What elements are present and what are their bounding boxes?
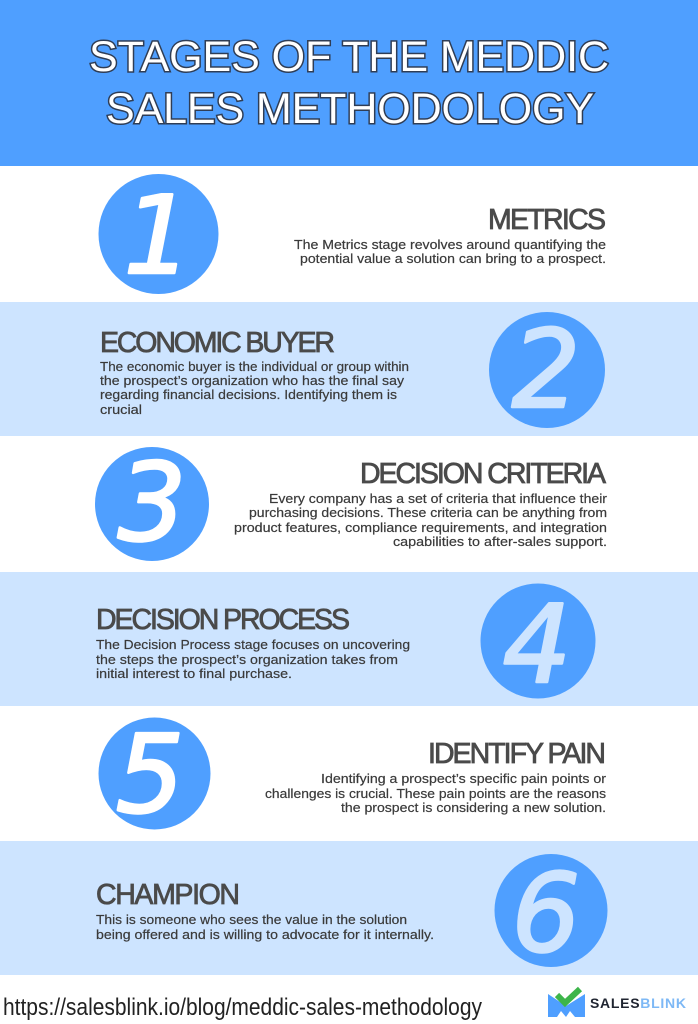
panel: 2 economic buyer: 2 xyxy=(512,308,580,433)
logo: salesblink: SALESBLINK xyxy=(590,995,686,1011)
panel: 1 metrics: 1 xyxy=(124,174,192,299)
panel: 6 champion: being offered and is willing to advocate for it internally. xyxy=(96,927,434,942)
panel: 6 champion: 6 xyxy=(512,852,580,977)
panel: 1 metrics: potential value a solution can bring to a prospect. xyxy=(300,251,606,266)
panel: 2 economic buyer: regarding financial decisions. Identifying them is xyxy=(100,387,398,402)
panel: 5 identify pain: IDENTIFY PAIN xyxy=(428,738,606,770)
logo: salesblink xyxy=(548,989,686,1017)
panel: 5 identify pain: the prospect is considering a new solution. xyxy=(341,800,606,815)
panel: 3 decision criteria: DECISION CRITERIA xyxy=(360,458,606,490)
panel: 2 economic buyer: crucial xyxy=(100,402,142,417)
panel: 2 economic buyer: The economic buyer is the individual or group within xyxy=(100,359,409,374)
panel: 3 decision criteria: capabilities to after-sales support. xyxy=(393,534,607,549)
panel: 5 identify pain: 5 xyxy=(116,713,184,838)
panel: 3 decision criteria xyxy=(0,436,698,572)
panel: 5 identify pain: Identifying a prospect’s specific pain points or xyxy=(321,771,607,786)
panel: 4 decision process: The Decision Process stage focuses on uncovering xyxy=(96,637,410,652)
panel: 5 identify pain xyxy=(0,706,698,841)
header band with title: SALES METHODOLOGY xyxy=(106,85,594,133)
header band with title: STAGES OF THE MEDDIC xyxy=(89,33,609,81)
panel: 3 decision criteria: Every company has a set of criteria that influence their xyxy=(269,491,608,506)
panel: 2 economic buyer: ECONOMIC BUYER xyxy=(100,327,335,359)
panel: 4 decision process: 4 xyxy=(503,583,571,708)
header band with title xyxy=(0,0,698,166)
panel: 6 champion: CHAMPION xyxy=(96,879,240,911)
source url: https://salesblink.io/blog/meddic-sales-methodology xyxy=(3,994,482,1021)
panel: 2 economic buyer: the prospect’s organization who has the final say xyxy=(100,373,405,388)
panel: 3 decision criteria: purchasing decisions. These criteria can be anything from xyxy=(249,505,607,520)
panel: 3 decision criteria: product features, compliance requirements, and integration xyxy=(234,520,607,535)
panel: 3 decision criteria: 3 xyxy=(118,441,186,566)
panel: 6 champion xyxy=(0,841,698,977)
panel: 4 decision process: initial interest to final purchase. xyxy=(96,666,292,681)
panel: 6 champion: This is someone who sees the value in the solution xyxy=(96,912,407,927)
panel: 4 decision process: the steps the prospect’s organization takes from xyxy=(96,652,398,667)
panel: 1 metrics xyxy=(0,166,698,302)
panel: 5 identify pain: challenges is crucial. These pain points are the reasons xyxy=(265,786,607,801)
panel: 1 metrics: METRICS xyxy=(488,204,606,236)
panel: 1 metrics: The Metrics stage revolves around quantifying the xyxy=(294,237,606,252)
panel: 4 decision process xyxy=(0,572,698,708)
panel: 2 economic buyer xyxy=(0,302,698,436)
panel: 4 decision process: DECISION PROCESS xyxy=(96,604,350,636)
